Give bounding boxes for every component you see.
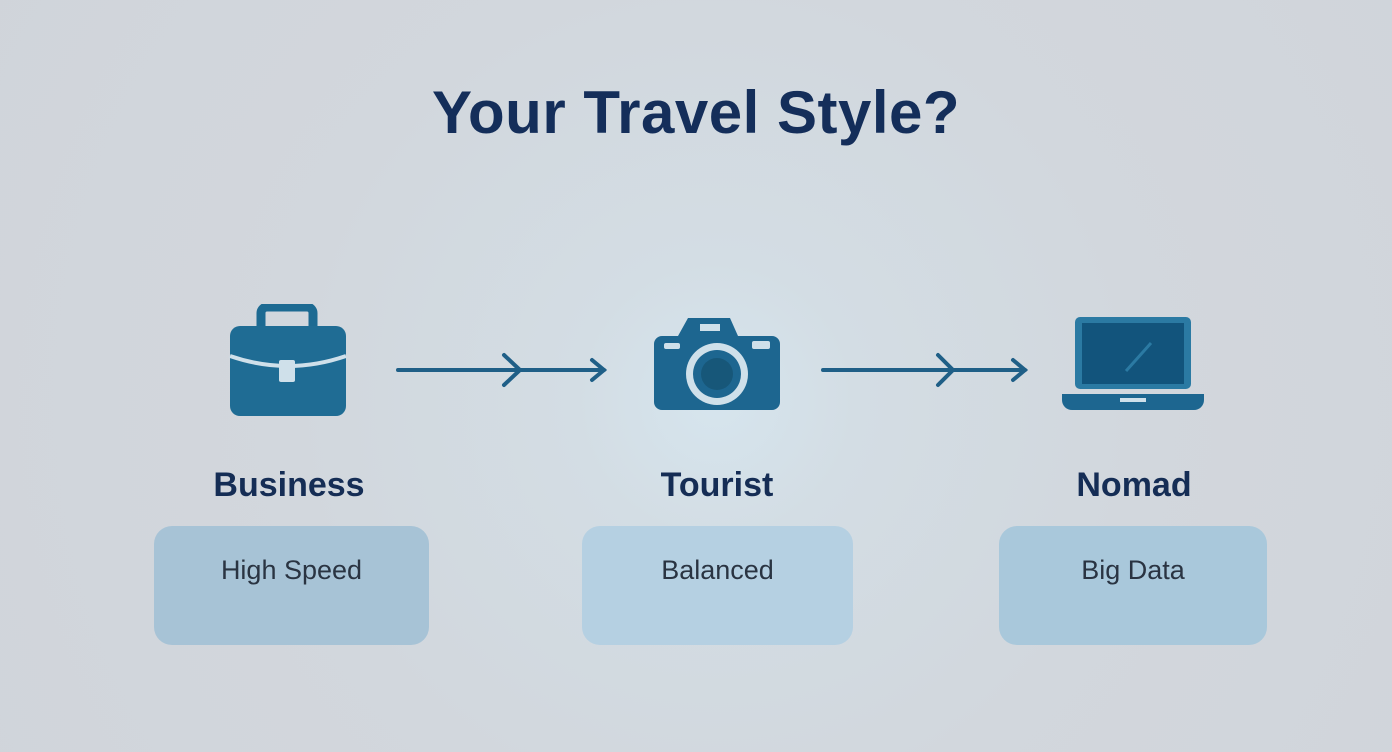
title: Your Travel Style? xyxy=(432,79,960,146)
arrow 1 xyxy=(396,352,607,388)
icon: camera xyxy=(654,318,780,410)
box: Balanced: Balanced xyxy=(661,555,774,585)
box: Big Data xyxy=(999,526,1267,645)
arrow 2 xyxy=(821,352,1028,388)
label: Business: Business xyxy=(213,466,365,504)
label: Tourist: Tourist xyxy=(661,466,773,504)
box: Big Data: Big Data xyxy=(1081,555,1185,585)
label: Nomad: Nomad xyxy=(1076,466,1192,504)
box: Balanced xyxy=(582,526,853,645)
box: High Speed xyxy=(154,526,429,645)
icon: briefcase xyxy=(230,304,346,416)
box: High Speed: High Speed xyxy=(221,555,362,585)
icon: laptop xyxy=(1062,317,1204,410)
